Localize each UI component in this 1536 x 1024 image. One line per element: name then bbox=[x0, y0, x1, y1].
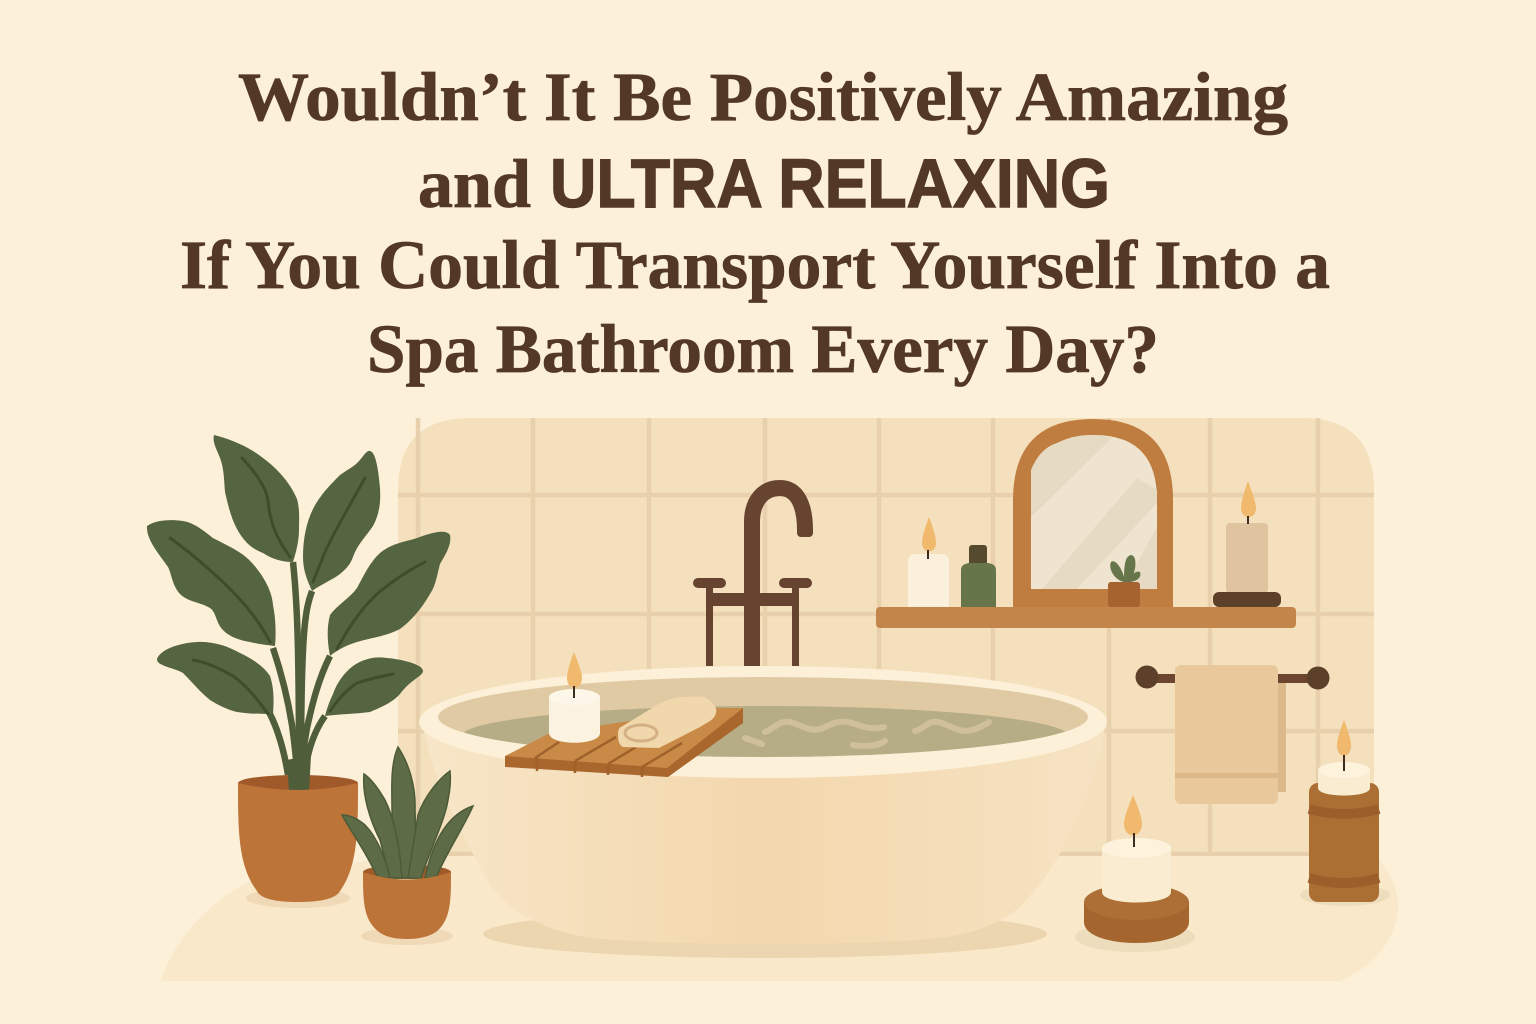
title: Wouldn’t It Be Positively Amazing bbox=[238, 59, 1288, 135]
stems bbox=[270, 562, 330, 775]
towel rail and towel bbox=[1136, 665, 1330, 804]
title: Spa Bathroom Every Day? bbox=[367, 311, 1159, 387]
tub rim bbox=[419, 666, 1107, 778]
tub shadow bbox=[483, 910, 1047, 958]
small plant bbox=[342, 747, 473, 878]
faucet bbox=[693, 488, 813, 666]
tub basin bbox=[438, 677, 1088, 757]
rolled towel bbox=[618, 696, 716, 748]
water ripples bbox=[745, 722, 989, 746]
tiled wall bbox=[398, 418, 1374, 856]
shelf bbox=[876, 607, 1296, 628]
title: ULTRA RELAXING bbox=[550, 145, 1110, 222]
large pot bbox=[238, 755, 358, 908]
small pot bbox=[363, 872, 451, 939]
tub candle bbox=[549, 652, 600, 743]
bathtub bbox=[419, 666, 1107, 958]
wooden pillar candle bbox=[1300, 720, 1390, 906]
shelf with mirror, candles, bottle and plant bbox=[876, 419, 1296, 628]
title: and bbox=[418, 146, 531, 222]
bath tray bbox=[505, 708, 743, 777]
leaf ribs bbox=[170, 458, 425, 714]
tub body bbox=[424, 730, 1105, 944]
small pot shadow and rim bbox=[361, 865, 453, 945]
candle left bbox=[908, 517, 949, 607]
small potted plant bbox=[1108, 555, 1140, 607]
bottle bbox=[961, 545, 996, 607]
title bbox=[180, 59, 1330, 387]
title: If You Could Transport Yourself Into a bbox=[180, 227, 1330, 303]
floor candle on round base bbox=[1075, 795, 1195, 952]
water bbox=[464, 706, 1065, 757]
large plant bbox=[147, 435, 450, 775]
leaves bbox=[147, 435, 450, 716]
floor bbox=[161, 856, 1398, 981]
candle right bbox=[1213, 481, 1281, 607]
mirror bbox=[1013, 419, 1173, 607]
